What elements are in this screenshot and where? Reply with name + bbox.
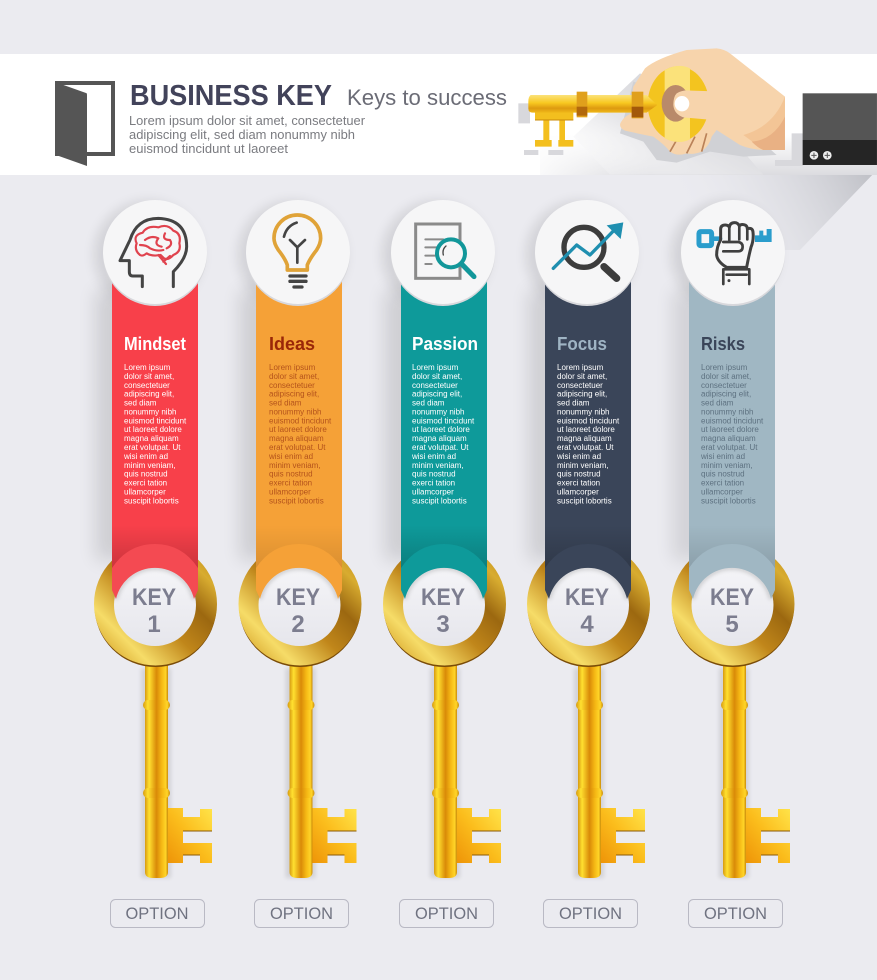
icon circle: magnifier with growth arrow (535, 200, 639, 306)
text block: consectetuer (701, 381, 747, 390)
option button (400, 900, 494, 928)
text block: minim veniam, (124, 461, 176, 470)
long corner shadow under header (540, 170, 877, 250)
text block: Lorem ipsum (269, 363, 316, 372)
text block: adipiscing elit, (412, 390, 462, 399)
text block: dolor sit amet, (701, 372, 751, 381)
icon circle: document with magnifier (391, 200, 495, 306)
text block: consectetuer (412, 381, 458, 390)
text block: sed diam (124, 399, 157, 408)
text block: adipiscing elit, (557, 390, 607, 399)
option button (688, 900, 782, 928)
text block: sed diam (557, 399, 590, 408)
ribbon fold and key label: 2 (291, 611, 305, 638)
golden key 1 (94, 545, 216, 878)
ribbon fold and key label: KEY (276, 584, 320, 611)
text block: ullamcorper (124, 487, 166, 496)
column 4: Focus (526, 200, 650, 928)
text block: erat volutpat. Ut (269, 443, 326, 452)
option button: OPTION (415, 904, 478, 923)
option button: OPTION (559, 904, 622, 923)
text block: euismod tincidunt (124, 416, 187, 425)
option button: OPTION (126, 904, 188, 923)
text block: exerci tation (124, 479, 167, 488)
icon circle: brain head (103, 200, 207, 306)
text block: consectetuer (269, 381, 315, 390)
golden key 4 (528, 545, 650, 878)
text block: ut laoreet dolore (557, 425, 615, 434)
ribbon fold and key label (112, 544, 198, 638)
text block: exerci tation (412, 479, 455, 488)
text block: magna aliquam (412, 434, 467, 443)
text block: erat volutpat. Ut (412, 443, 469, 452)
ribbon fold and key label: KEY (710, 584, 754, 611)
header description: Lorem ipsum dolor sit amet, consectetuer (129, 113, 366, 128)
text block: dolor sit amet, (124, 372, 174, 381)
option button (544, 900, 638, 928)
text block: euismod tincidunt (269, 416, 332, 425)
text block: erat volutpat. Ut (124, 443, 181, 452)
text block: consectetuer (124, 381, 170, 390)
text block: wisi enim ad (700, 452, 745, 461)
text block: quis nostrud (701, 470, 745, 479)
text block: euismod tincidunt (557, 416, 620, 425)
option button: OPTION (270, 904, 333, 923)
ribbon (256, 280, 342, 572)
text block: magna aliquam (701, 434, 756, 443)
text block: adipiscing elit, (701, 390, 751, 399)
text block: suscipit lobortis (557, 496, 612, 505)
text block: magna aliquam (124, 434, 179, 443)
text block: quis nostrud (412, 470, 456, 479)
ribbon fold and key label: 4 (580, 611, 594, 638)
text block: exerci tation (269, 479, 312, 488)
text block: sed diam (269, 399, 302, 408)
text block: ut laoreet dolore (412, 425, 470, 434)
heading: Ideas (269, 334, 315, 354)
text block: nonummy nibh (269, 407, 321, 416)
text block: Lorem ipsum (124, 363, 171, 372)
text block: suscipit lobortis (701, 496, 756, 505)
text block: suscipit lobortis (124, 496, 179, 505)
heading: Mindset (124, 334, 186, 354)
text block: exerci tation (557, 479, 600, 488)
text block: dolor sit amet, (269, 372, 319, 381)
text block: wisi enim ad (556, 452, 601, 461)
text block: Lorem ipsum (701, 363, 748, 372)
subtitle: Keys to success (347, 85, 507, 110)
text block: wisi enim ad (268, 452, 313, 461)
text block: euismod tincidunt (412, 416, 475, 425)
ribbon fold and key label: 5 (725, 611, 739, 638)
text block: ullamcorper (412, 487, 454, 496)
text block: minim veniam, (412, 461, 464, 470)
ribbon (112, 280, 198, 572)
text block: wisi enim ad (411, 452, 456, 461)
text block: exerci tation (701, 479, 744, 488)
text block: nonummy nibh (557, 407, 609, 416)
ribbon (689, 280, 775, 572)
column 5: Risks (671, 200, 794, 928)
text block: erat volutpat. Ut (557, 443, 614, 452)
heading: Risks (701, 334, 745, 354)
ribbon fold and key label (401, 544, 487, 638)
heading: Passion (412, 334, 478, 354)
column 2: Ideas (238, 200, 361, 928)
text block: nonummy nibh (701, 407, 753, 416)
text block: Lorem ipsum (557, 363, 604, 372)
text block: ullamcorper (701, 487, 743, 496)
text block: quis nostrud (557, 470, 601, 479)
icon circle: fist holding key (681, 200, 785, 306)
option button: OPTION (704, 904, 767, 923)
column 1: Mindset (94, 200, 216, 928)
text block: dolor sit amet, (557, 372, 607, 381)
text block: sed diam (701, 399, 734, 408)
ribbon fold and key label: 1 (147, 611, 161, 638)
icon circle: light bulb (246, 200, 350, 306)
text block: ullamcorper (269, 487, 311, 496)
text block: Lorem ipsum (412, 363, 459, 372)
ribbon fold and key label: 3 (436, 611, 450, 638)
text block: consectetuer (557, 381, 603, 390)
title: BUSINESS KEY (130, 80, 332, 112)
column 3: Passion (382, 200, 506, 928)
text block: ut laoreet dolore (269, 425, 327, 434)
text block: quis nostrud (124, 470, 168, 479)
ribbon fold and key label (689, 544, 775, 638)
header band (0, 48, 877, 175)
text block: minim veniam, (557, 461, 609, 470)
text block: magna aliquam (557, 434, 612, 443)
text block: sed diam (412, 399, 445, 408)
text block: ullamcorper (557, 487, 599, 496)
ribbon fold and key label: KEY (132, 584, 176, 611)
text block: dolor sit amet, (412, 372, 462, 381)
option button (254, 900, 348, 928)
ribbon fold and key label: KEY (565, 584, 609, 611)
text block: minim veniam, (701, 461, 753, 470)
text block: nonummy nibh (124, 407, 176, 416)
text block: ut laoreet dolore (124, 425, 182, 434)
ribbon (401, 280, 487, 572)
text block: nonummy nibh (412, 407, 464, 416)
text block: wisi enim ad (123, 452, 168, 461)
ribbon fold and key label (256, 544, 342, 638)
ribbon fold and key label: KEY (421, 584, 465, 611)
text block: suscipit lobortis (412, 496, 467, 505)
text block: euismod tincidunt (701, 416, 764, 425)
text block: erat volutpat. Ut (701, 443, 758, 452)
text block: quis nostrud (269, 470, 313, 479)
golden key 3 (384, 545, 506, 878)
ribbon fold and key label (545, 544, 631, 638)
text block: ut laoreet dolore (701, 425, 759, 434)
text block: minim veniam, (269, 461, 321, 470)
icon: door (55, 82, 113, 166)
heading: Focus (557, 334, 607, 354)
text block: magna aliquam (269, 434, 324, 443)
sleeve (803, 93, 877, 165)
text block: adipiscing elit, (269, 390, 319, 399)
golden key 5 (672, 545, 794, 878)
header description: euismod tincidunt ut laoreet (129, 141, 288, 156)
golden key 2 (239, 545, 361, 878)
text block: adipiscing elit, (124, 390, 174, 399)
header description (129, 113, 366, 156)
option button (110, 900, 204, 928)
icon: hand holding golden key (518, 48, 877, 175)
header description: adipiscing elit, sed diam nonummy nibh (129, 127, 355, 142)
ribbon (545, 280, 631, 572)
text block: suscipit lobortis (269, 496, 324, 505)
